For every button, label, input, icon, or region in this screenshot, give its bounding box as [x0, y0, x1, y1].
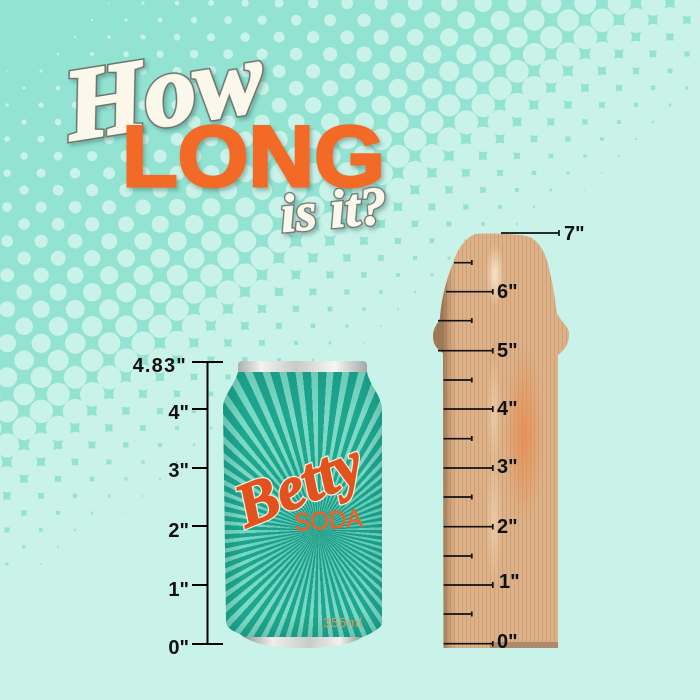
inch labels: 6" — [497, 281, 518, 303]
scale labels: 1" — [168, 579, 189, 601]
inch labels: 7" — [564, 223, 585, 245]
volume: 355ml: 355ml — [323, 615, 362, 630]
wood bottom bevel — [490, 642, 558, 648]
title word: How: How — [56, 20, 271, 163]
brand: SODA: SODA — [293, 504, 364, 537]
inch labels: 1" — [499, 571, 520, 593]
scale labels: 4" — [168, 402, 189, 424]
wood height scale — [438, 223, 585, 653]
inch labels: 5" — [497, 340, 518, 362]
brand: Betty: Betty — [225, 429, 373, 541]
inch labels: 0" — [497, 631, 518, 653]
can height scale — [132, 355, 223, 659]
scale labels: 4.83" — [133, 355, 187, 377]
scale lines — [192, 362, 223, 644]
title word: is it?: is it? — [278, 175, 389, 244]
can body with sunburst — [223, 372, 382, 637]
can bottom ring — [242, 636, 362, 648]
scale labels: 3" — [168, 460, 189, 482]
major ticks — [438, 230, 559, 646]
title: How LONG is it? — [56, 20, 390, 244]
title word: How: How — [56, 20, 271, 163]
soda can — [223, 361, 382, 648]
scale labels: 2" — [168, 520, 189, 542]
inch labels: 4" — [497, 398, 518, 420]
brand: Betty: Betty — [225, 429, 373, 541]
title word: is it?: is it? — [278, 175, 389, 244]
inch labels — [497, 223, 585, 653]
inch labels: 3" — [497, 456, 518, 478]
inch labels: 2" — [497, 516, 518, 538]
can label text — [225, 429, 373, 630]
can top rim — [238, 361, 367, 373]
scale labels — [133, 355, 189, 659]
scale labels: 0" — [168, 637, 189, 659]
title word: LONG: LONG — [122, 109, 385, 205]
wooden measuring shape — [430, 230, 572, 650]
minor ticks — [438, 260, 472, 616]
